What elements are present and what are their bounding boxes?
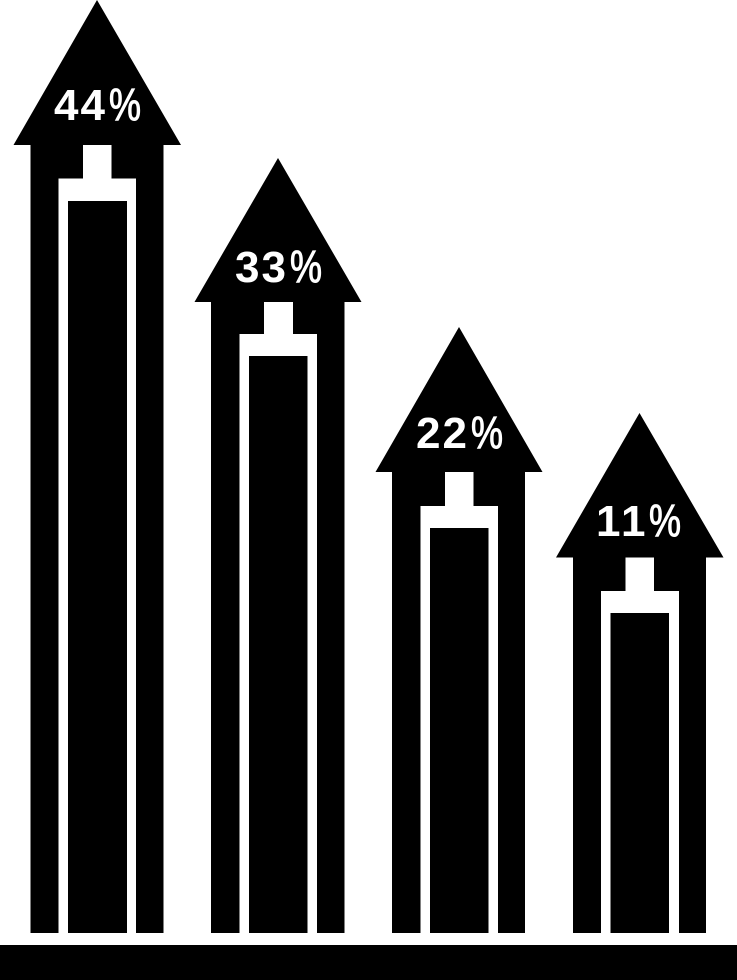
arrow bar: 33%: [194, 158, 362, 933]
value label: 44%: 44: [54, 81, 107, 130]
value label: 33%: [235, 241, 322, 292]
value label: 22%: 22: [416, 409, 469, 458]
arrow bar: 44%: [14, 0, 181, 933]
value label: 11%: 11: [596, 497, 649, 546]
arrow bar: 11%: [556, 413, 724, 933]
value label: 44%: %: [109, 79, 141, 130]
value label: 33%: 33: [235, 243, 288, 292]
value label: 22%: [416, 407, 503, 458]
arrow bar: 22%: [376, 327, 542, 933]
value label: 33%: %: [290, 241, 322, 292]
value label: 22%: %: [471, 407, 503, 458]
value label: 11%: %: [649, 495, 681, 546]
baseline bar: [0, 945, 737, 980]
value label: 11%: [596, 495, 681, 546]
value label: 44%: [54, 79, 141, 130]
